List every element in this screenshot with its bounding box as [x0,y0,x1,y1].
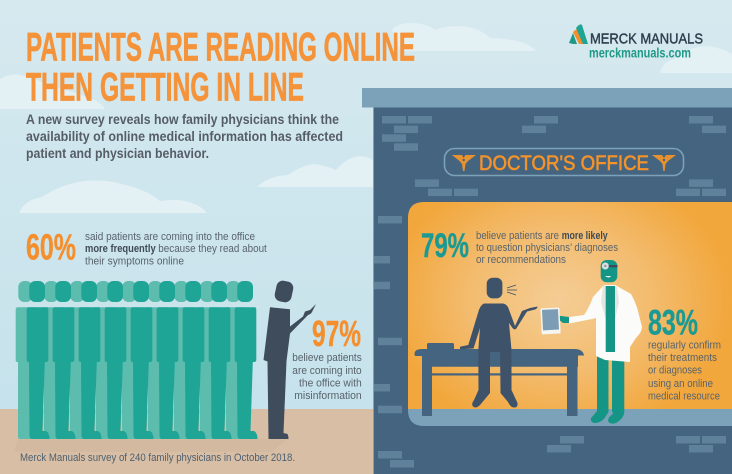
building wall edge [373,107,374,474]
intro text [26,111,343,161]
sign: doctor's office [444,148,684,176]
79% description: to question physicians’ diagnoses [476,242,618,254]
table top [414,349,584,416]
stat: 60% [26,226,267,268]
title: THEN GETTING IN LINE [26,66,304,110]
stat: 79% [421,227,618,266]
97% description: believe patients [292,352,362,364]
60% description: their symptoms online [85,256,184,268]
window: office interior [408,202,732,409]
standing man with phone [264,279,316,439]
building roof [362,88,732,108]
ground shadow [14,439,288,452]
title: PATIENTS ARE READING ONLINE [26,26,415,70]
97% description: are coming into [292,365,362,377]
doctor coat [569,285,642,362]
tablet frame [540,307,561,334]
doctor head mirror [602,262,618,278]
icon: caduceus right [652,155,676,171]
60% description [85,231,267,268]
83% description [648,340,721,402]
stat: 83% [648,304,721,402]
intro text: A new survey reveals how family physicians think the [26,111,339,127]
79% number: 79% [421,227,469,265]
doctor shirt [606,286,615,352]
building wall [373,107,732,474]
83% number: 83% [648,304,698,343]
logo icon [569,24,588,44]
doctor figure [555,260,642,424]
tablet screen [542,309,559,330]
97% number: 97% [312,313,361,354]
footnote: Merck Manuals survey of 240 family physicians in October 2018. [20,452,295,464]
83% description: their treatments [648,352,717,364]
60% description: more frequently [85,243,156,255]
60% description: said patients are coming into the office [85,231,255,243]
patient head [487,278,502,298]
sign frame [444,148,684,176]
logo url: merckmanuals.com [589,45,691,61]
title [26,26,415,110]
79% description: or recommendations [476,254,566,266]
building [362,88,732,474]
floor [408,409,732,426]
exam table [414,343,584,416]
doctor hand [555,316,569,323]
man body [264,304,316,439]
60% number: 60% [26,226,76,268]
97% description: the office with [299,378,362,390]
table crossbar [432,373,567,376]
doctor lapels [601,286,619,320]
intro text: availability of online medical information has affected [26,128,343,144]
clouds [0,23,732,213]
patient body [460,304,538,408]
icon: caduceus left [452,155,476,171]
83% description: or diagnoses [648,365,702,377]
table right leg [567,355,578,416]
79% description: more likely [562,230,608,242]
logo: Merck Manuals [569,24,703,61]
table pillow [427,343,454,350]
crowd of patients [16,281,258,439]
doctor head [601,260,617,282]
patient figure [460,278,538,408]
79% description [476,230,618,266]
doctor legs [591,350,624,424]
ground [0,409,374,474]
97% description: misinformation [294,390,362,402]
83% description: regularly confirm [648,340,721,352]
sign text: DOCTOR'S OFFICE [479,152,649,175]
logo name: MERCK MANUALS [590,32,703,48]
intro text: patient and physician behavior. [26,145,209,161]
tablet [540,307,561,334]
60% description: because they read about [158,243,267,255]
97% description [292,352,362,402]
79% description: believe patients are [476,230,559,242]
man head [274,279,294,304]
83% description: using an online [648,378,713,390]
stat: 97% [292,313,362,402]
bricks [374,116,726,468]
speech lines [507,285,517,295]
83% description: medical resource [648,390,720,402]
